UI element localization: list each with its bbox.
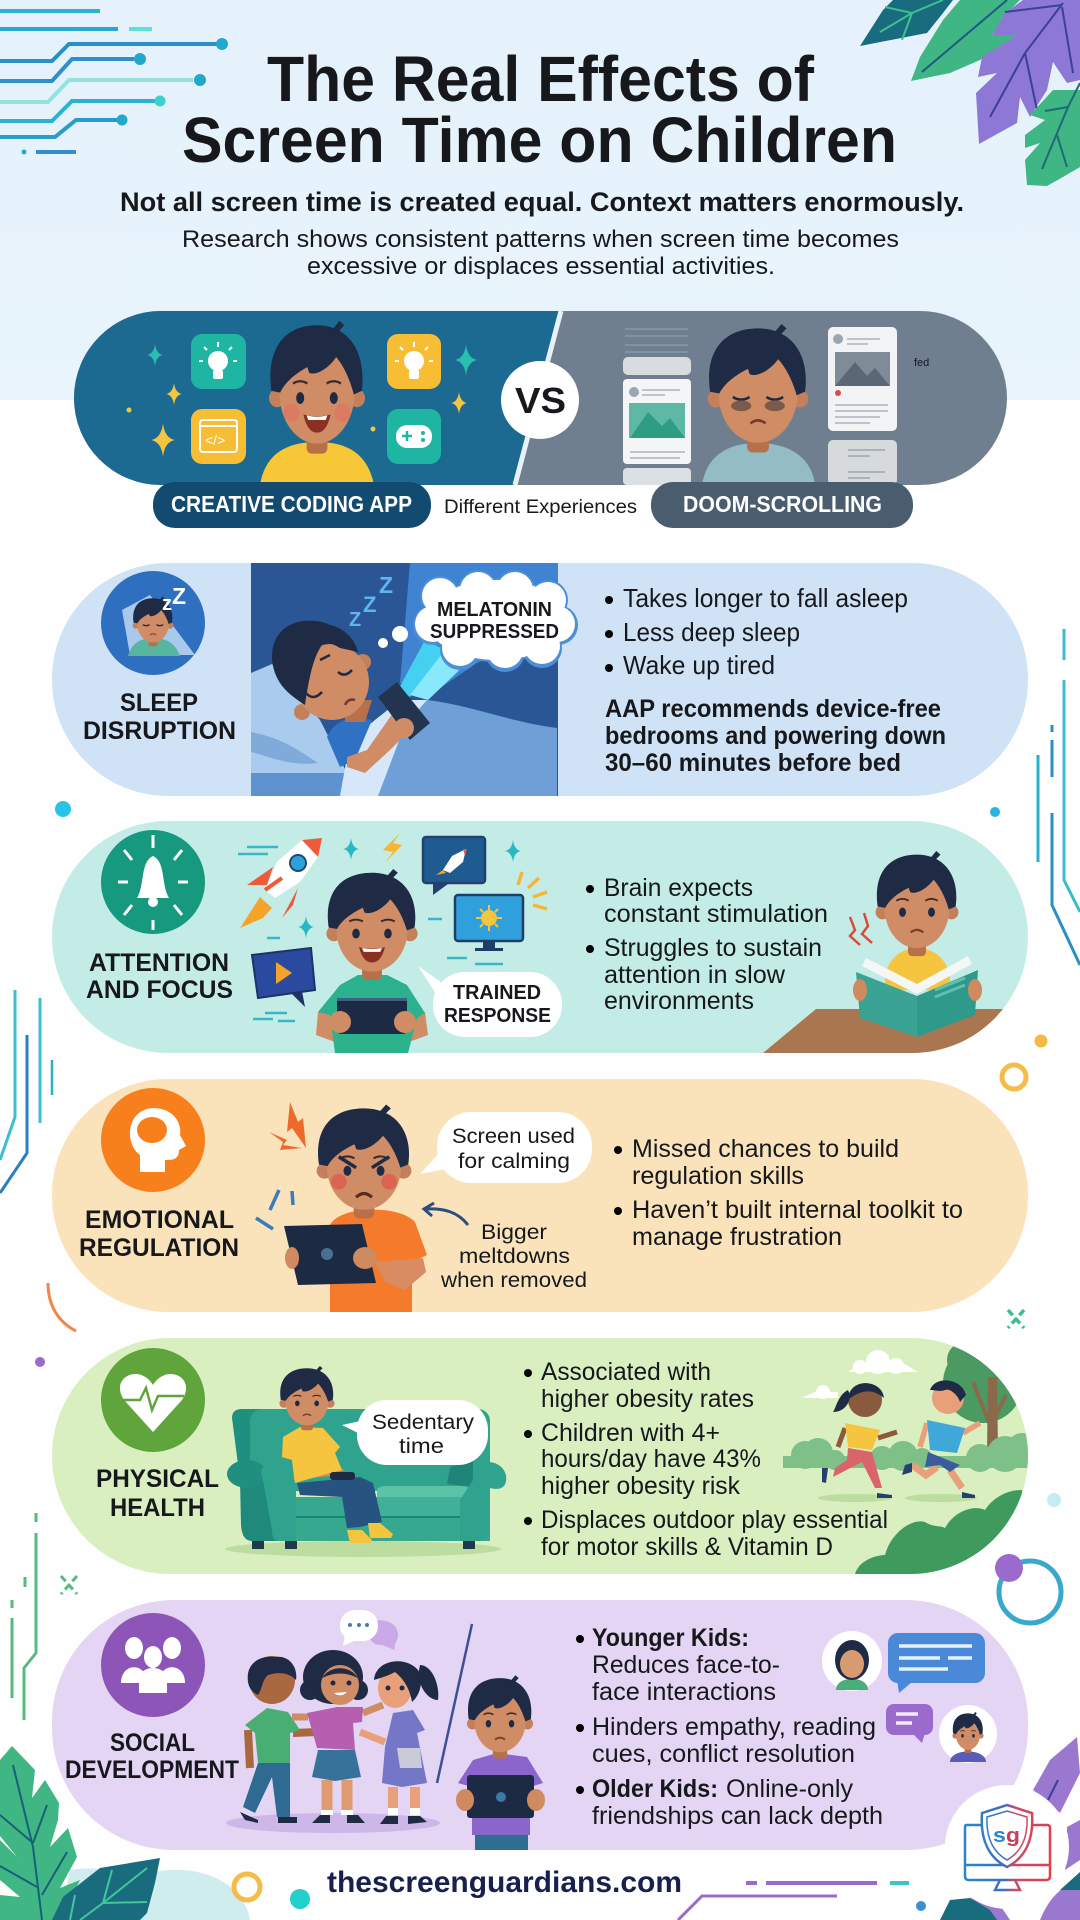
text: emotional effects: manage frustration bbox=[632, 1223, 842, 1251]
text: AAP recommendation: 30–60 minutes before bed bbox=[605, 749, 901, 777]
label: bigger meltdowns bbox=[440, 1221, 587, 1292]
icon: head with brain bbox=[101, 1088, 205, 1192]
decorative dots bbox=[35, 801, 1061, 1582]
icon: sleeping child: Z bbox=[172, 583, 186, 609]
text: attention effects: attention in slow bbox=[604, 961, 786, 989]
illustration: children running outdoors bbox=[783, 1342, 1037, 1574]
illustration: child on sofa bbox=[225, 1366, 506, 1557]
heading: sleep disruption bbox=[83, 689, 236, 745]
callout: sedentary time: Sedentary bbox=[372, 1411, 475, 1434]
callout: trained response: TRAINED bbox=[453, 982, 541, 1004]
label: bigger meltdowns: when removed bbox=[440, 1269, 587, 1292]
title bbox=[182, 43, 897, 176]
heading: attention and focus bbox=[86, 949, 233, 1004]
text: physical effects: Displaces outdoor play essential bbox=[541, 1506, 888, 1534]
icon: heart with pulse bbox=[101, 1348, 205, 1452]
callout: sedentary time: time bbox=[399, 1435, 444, 1458]
icon: group of people bbox=[101, 1613, 205, 1717]
text: sleep effects: Wake up tired bbox=[623, 650, 775, 680]
text: attention effects: environments bbox=[604, 987, 754, 1015]
callout: screen used for calming: for calming bbox=[458, 1150, 570, 1173]
text: attention effects: constant stimulation bbox=[604, 900, 828, 928]
label: doom-scrolling bbox=[651, 482, 913, 528]
label: creative coding app bbox=[153, 482, 431, 528]
text: social effects: face interactions bbox=[592, 1678, 776, 1706]
text: sleep effects: Less deep sleep bbox=[623, 617, 800, 647]
panel: emotional regulation bbox=[52, 1079, 1028, 1312]
text: physical effects: higher obesity risk bbox=[541, 1472, 740, 1500]
text: physical effects: Children with 4+ bbox=[541, 1419, 720, 1447]
text: physical effects: hours/day have 43% bbox=[541, 1445, 761, 1473]
text: social effects: Younger Kids: bbox=[592, 1624, 749, 1652]
text: social effects bbox=[576, 1624, 883, 1830]
text: attention effects: Brain expects bbox=[604, 874, 753, 902]
leaves bottom right bbox=[940, 1737, 1080, 1920]
panel: sleep disruption bbox=[52, 563, 1028, 796]
illustration: child with phone in bed: Z bbox=[379, 572, 393, 598]
illustration: rocket bbox=[238, 838, 322, 928]
logo: screen guardians bbox=[945, 1785, 1069, 1909]
panel: social development bbox=[52, 1600, 1028, 1850]
heading: emotional regulation bbox=[79, 1206, 239, 1262]
callout: trained response: RESPONSE bbox=[444, 1005, 551, 1027]
heading: social development bbox=[65, 1729, 239, 1784]
heading: sleep disruption: SLEEP bbox=[120, 689, 198, 717]
text: sleep effects bbox=[605, 583, 908, 680]
text: emotional effects: Missed chances to build bbox=[632, 1135, 899, 1163]
illustration: child alone with tablet bbox=[456, 1675, 545, 1850]
text: social effects: friendships can lack depth bbox=[592, 1802, 883, 1830]
footer website: thescreenguardians.com bbox=[327, 1866, 682, 1899]
decorative circuits and dots bbox=[0, 629, 1080, 1720]
text: AAP recommendation: bedrooms and powering down bbox=[605, 722, 946, 750]
text: physical effects: for motor skills & Vitamin D bbox=[541, 1533, 833, 1561]
intro text: excessive or displaces essential activities. bbox=[307, 253, 775, 280]
heading: attention and focus: AND FOCUS bbox=[86, 976, 233, 1004]
label: doom-scrolling: DOOM-SCROLLING bbox=[683, 491, 882, 517]
callout: screen used for calming bbox=[420, 1112, 592, 1183]
heading: emotional regulation: REGULATION bbox=[79, 1234, 239, 1262]
icon: sleeping child bbox=[101, 571, 205, 675]
text: social effects: Online-only bbox=[726, 1775, 854, 1803]
circuit lines top left bbox=[0, 11, 228, 154]
arrow: to child bbox=[424, 1203, 468, 1225]
panel: physical health bbox=[52, 1338, 1037, 1574]
callout: melatonin suppressed bbox=[413, 570, 578, 672]
comparison banner bbox=[74, 311, 1007, 528]
text: physical effects bbox=[524, 1358, 888, 1561]
text: AAP recommendation: AAP recommends device-free bbox=[605, 695, 941, 723]
VS badge: VS bbox=[515, 380, 566, 421]
illustration: group of children bbox=[226, 1650, 440, 1833]
illustration: online chat bbox=[822, 1631, 997, 1763]
heading: physical health: PHYSICAL bbox=[96, 1465, 219, 1493]
callout: melatonin suppressed: SUPPRESSED bbox=[430, 621, 559, 643]
text: AAP recommendation bbox=[605, 695, 946, 777]
text: physical effects: Associated with bbox=[541, 1358, 711, 1386]
panel: doom-scrolling side bbox=[623, 324, 929, 485]
intro text bbox=[182, 226, 899, 280]
illustration: child with phone in bed: Z bbox=[349, 609, 361, 631]
illustration: child reading at table bbox=[763, 851, 1010, 1053]
callout: screen used for calming: Screen used bbox=[452, 1125, 575, 1148]
illustration: upset child with tablet bbox=[256, 1102, 427, 1312]
text: emotional effects: Haven’t built internal toolkit to bbox=[632, 1196, 963, 1224]
text: social effects: Older Kids: bbox=[592, 1775, 718, 1803]
illustration: child with phone in bed: Z bbox=[363, 592, 376, 617]
callout: sedentary time bbox=[342, 1400, 488, 1465]
logo: screen guardians: sg bbox=[993, 1825, 1020, 1847]
text: emotional effects: regulation skills bbox=[632, 1162, 804, 1190]
heading: physical health: HEALTH bbox=[110, 1494, 205, 1522]
subtitle: Not all screen time is created equal. Context matters enormously. bbox=[120, 187, 964, 217]
callout: melatonin suppressed: MELATONIN bbox=[437, 599, 552, 621]
heading: physical health bbox=[96, 1465, 219, 1522]
panel: attention and focus bbox=[52, 821, 1028, 1053]
illustration: child with phone in bed bbox=[251, 563, 558, 796]
text: sleep effects: Takes longer to fall asleep bbox=[623, 583, 908, 613]
heading: emotional regulation: EMOTIONAL bbox=[85, 1206, 234, 1234]
icon: speech bubbles bbox=[340, 1610, 398, 1650]
leaves bottom left bbox=[0, 1746, 250, 1920]
label: different experiences: Different Experiences bbox=[444, 497, 637, 518]
text: social effects: Reduces face-to- bbox=[592, 1651, 780, 1679]
text: emotional effects bbox=[614, 1135, 963, 1251]
illustration: screens and sparks bbox=[252, 833, 547, 1021]
icon: sleeping child: z bbox=[162, 593, 172, 615]
text: attention effects bbox=[586, 874, 828, 1015]
text: social effects: cues, conflict resolution bbox=[592, 1740, 855, 1768]
leaves top right bbox=[860, 0, 1080, 186]
intro text: Research shows consistent patterns when screen time becomes bbox=[182, 226, 899, 253]
panel: creative coding side bbox=[126, 321, 477, 485]
text: attention effects: Struggles to sustain bbox=[604, 934, 822, 962]
text: physical effects: higher obesity rates bbox=[541, 1385, 754, 1413]
heading: attention and focus: ATTENTION bbox=[89, 949, 229, 977]
label: creative coding app: CREATIVE CODING APP bbox=[171, 491, 412, 517]
illustration: child with tablet bbox=[316, 869, 428, 1053]
heading: social development: SOCIAL bbox=[110, 1729, 195, 1757]
label: bigger meltdowns: Bigger bbox=[481, 1221, 547, 1244]
callout: trained response bbox=[418, 966, 562, 1037]
label: bigger meltdowns: meltdowns bbox=[459, 1245, 570, 1268]
footer decorations bbox=[234, 1874, 926, 1920]
title: The Real Effects of bbox=[267, 43, 815, 115]
panel: doom-scrolling side: fed bbox=[914, 357, 929, 369]
panel: creative coding side: </> bbox=[205, 432, 225, 448]
icon: bell with arrows bbox=[101, 830, 205, 934]
VS badge bbox=[501, 361, 579, 439]
heading: social development: DEVELOPMENT bbox=[65, 1756, 239, 1784]
divider line bbox=[437, 1624, 472, 1783]
text: social effects: Hinders empathy, reading bbox=[592, 1713, 876, 1741]
title: Screen Time on Children bbox=[182, 104, 897, 176]
heading: sleep disruption: DISRUPTION bbox=[83, 717, 236, 745]
